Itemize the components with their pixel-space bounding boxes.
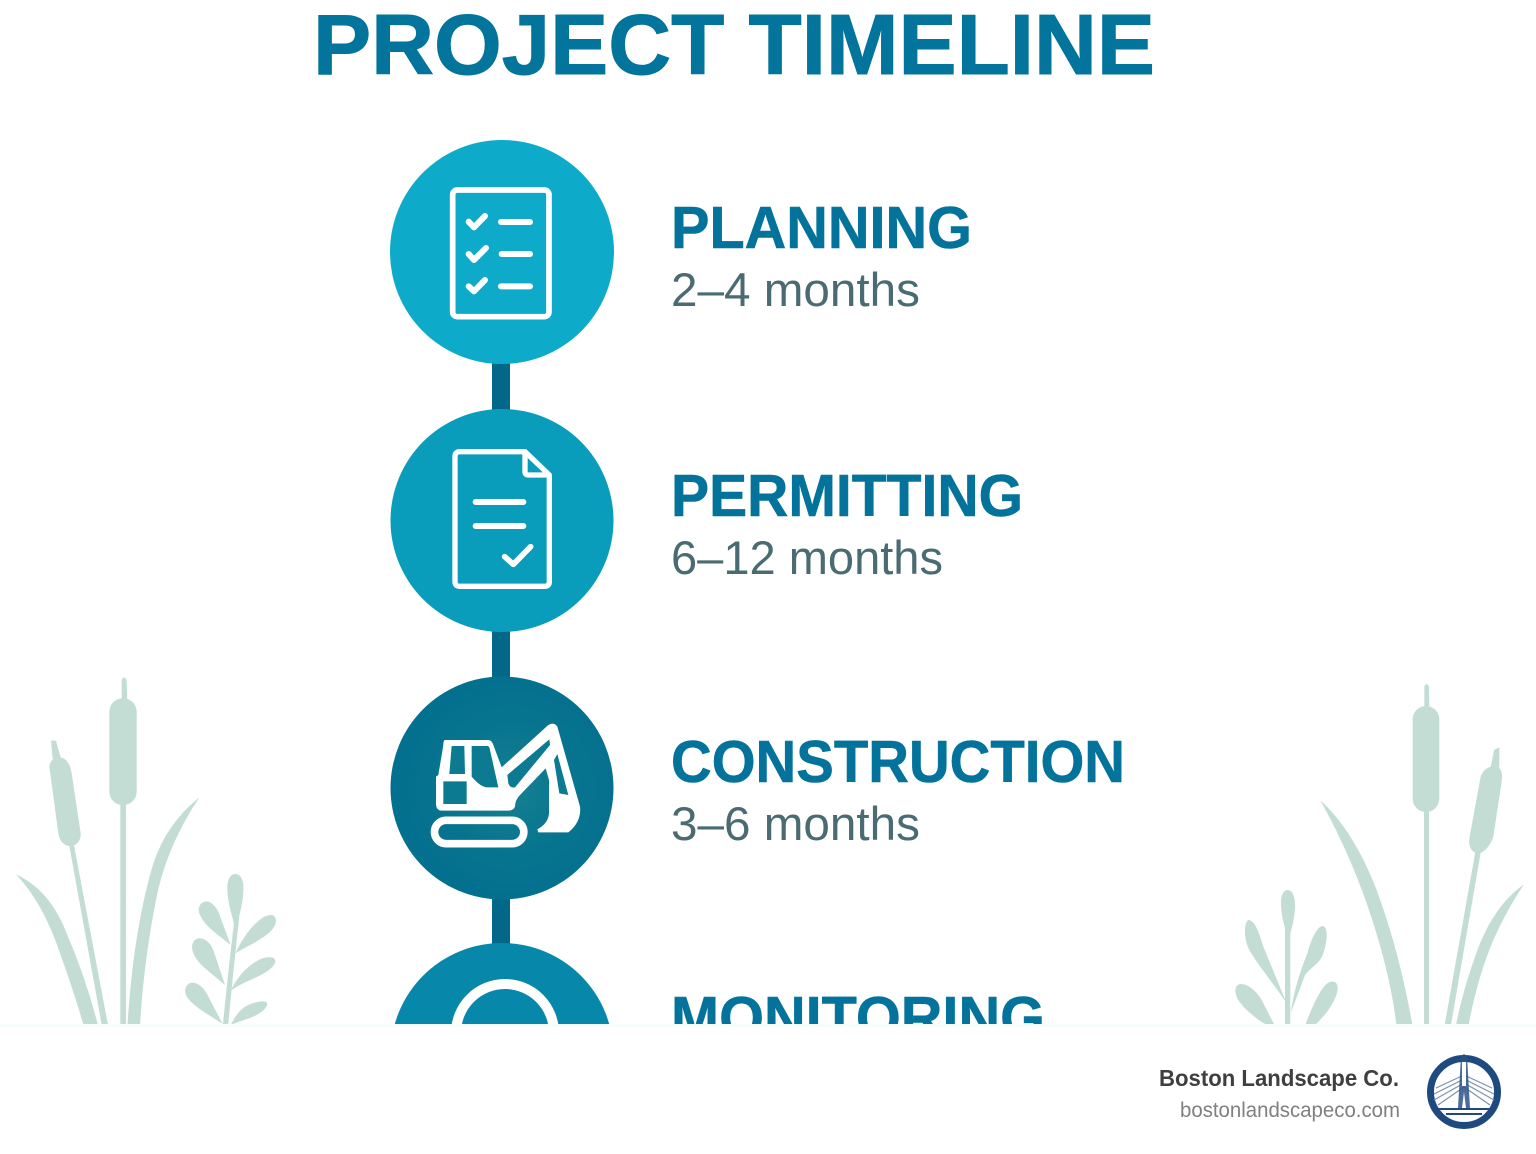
planning heading: PLANNING <box>671 195 972 261</box>
planning circle <box>390 140 614 364</box>
left reeds decoration <box>16 677 276 1027</box>
step: monitoring <box>390 943 1045 1154</box>
permitting heading: PERMITTING <box>671 463 1023 529</box>
icon: document with check <box>455 452 549 586</box>
step: permitting <box>390 409 1023 632</box>
timeline connector <box>492 340 510 980</box>
logo: bridge badge <box>1430 1054 1498 1126</box>
right reeds decoration <box>1235 684 1524 1027</box>
step: planning <box>390 140 972 364</box>
icon: checklist <box>453 190 549 317</box>
monitoring circle <box>390 943 614 1154</box>
monitoring heading: MONITORING <box>671 985 1045 1051</box>
construction heading: CONSTRUCTION <box>671 729 1125 795</box>
footer company name: Boston Landscape Co. <box>1159 1065 1399 1091</box>
footer tint line <box>0 1024 1536 1027</box>
title: PROJECT TIMELINE <box>313 0 1155 93</box>
construction duration: 3–6 months <box>671 797 920 850</box>
footer band <box>0 1024 1536 1154</box>
icon: excavator <box>434 724 580 844</box>
construction circle <box>390 676 614 900</box>
step: construction <box>390 676 1125 900</box>
permitting circle <box>390 409 614 632</box>
icon: magnifier ring <box>456 984 554 1082</box>
planning duration: 2–4 months <box>671 263 920 316</box>
footer website: bostonlandscapeco.com <box>1180 1099 1400 1122</box>
permitting duration: 6–12 months <box>671 531 943 584</box>
